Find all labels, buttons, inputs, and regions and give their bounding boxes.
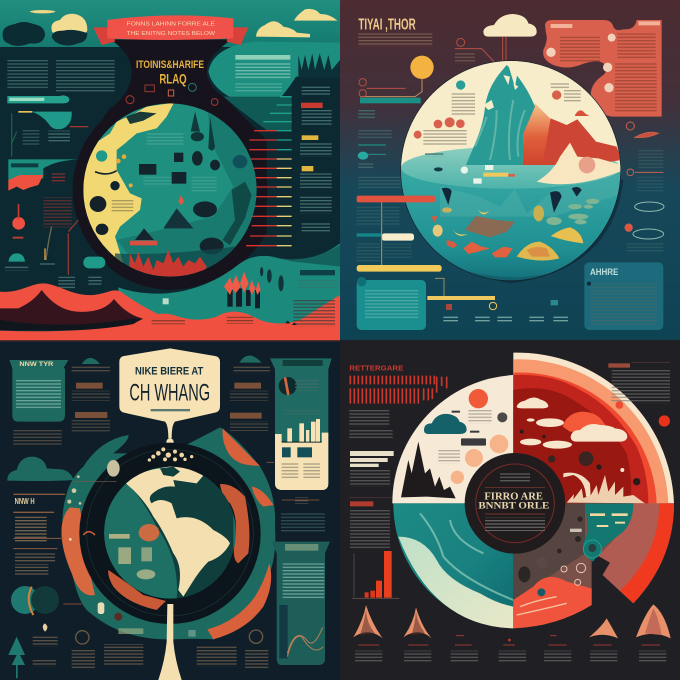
bar chart	[352, 551, 399, 598]
bottom stem	[158, 604, 182, 680]
title callout: CH WHANG	[129, 380, 210, 407]
pie: red quadrant	[513, 353, 674, 503]
seed particles above globe	[148, 447, 193, 462]
title: TIYAI ,THOR	[358, 16, 416, 33]
teal ring with orange currents	[61, 427, 275, 639]
top-right note	[608, 363, 670, 403]
icon: cloud	[483, 14, 537, 63]
right-side text	[267, 462, 325, 532]
caption row	[355, 636, 666, 662]
heading and tally bars	[349, 364, 447, 404]
icon: fingerprint	[67, 460, 120, 505]
pie: teal quadrant	[393, 503, 513, 628]
panel: bottom-left climate change globe infographic	[0, 340, 340, 680]
bottom label	[118, 628, 196, 637]
globe	[400, 40, 623, 287]
globe	[83, 100, 263, 287]
teal-blue panel: AHHRE	[590, 267, 618, 277]
icon row: red peaks	[353, 604, 671, 638]
left bubble diagram	[12, 111, 88, 157]
left pills	[357, 196, 442, 272]
notes right of title	[230, 356, 270, 431]
icon: teal oval	[358, 152, 402, 188]
center disc with title: BNNBT ORLE	[478, 501, 549, 511]
chart panel right	[270, 358, 332, 490]
icon: cream quadrant details	[424, 389, 508, 484]
heading panel left: NNW TYR	[19, 361, 54, 368]
teal pill heading	[7, 95, 69, 103]
pie: cream quadrant	[392, 375, 513, 503]
panel: top-left ocean and forest infographic	[0, 0, 340, 340]
teal-blue panel	[584, 262, 663, 330]
small callouts top-left	[359, 38, 495, 97]
red notes	[43, 173, 72, 227]
title	[136, 59, 204, 86]
heading and tally bars: RETTERGARE	[349, 364, 403, 373]
bottom teal wave	[118, 243, 340, 340]
globe	[104, 466, 236, 599]
panel: top-right mountain and ocean infographic	[340, 0, 680, 340]
title icons	[126, 83, 218, 105]
left notes: NNW H	[15, 497, 35, 506]
icon: red circle gauge	[12, 204, 25, 239]
title	[358, 16, 432, 47]
teal panel	[357, 277, 426, 330]
icon: cloud left	[7, 457, 73, 481]
red speech panel	[543, 20, 662, 117]
title callout	[119, 348, 220, 446]
left text blocks	[349, 410, 394, 548]
bottom red waves	[0, 283, 340, 340]
title callout: NIKE BIERE AT	[135, 365, 203, 377]
top-right teal panel	[208, 42, 340, 108]
banner: FONNS LAHINN FORRE ALE	[127, 21, 216, 27]
banner	[93, 15, 248, 45]
center disc with title: FIRRO ARE	[484, 491, 543, 502]
pie: dark-red quadrant	[513, 503, 674, 628]
title: RLAQ	[159, 70, 187, 86]
icon: black spiky mountain	[401, 442, 456, 498]
left notes	[13, 494, 95, 576]
clouds top right	[256, 9, 337, 37]
heading panel left	[9, 360, 68, 422]
teal capsule	[58, 257, 105, 290]
notes beside heading	[13, 358, 110, 445]
icon: leaf disc	[11, 586, 122, 621]
red and teal mini chart panel	[8, 159, 80, 191]
center disc with title	[465, 453, 565, 554]
icon: teal dome	[5, 253, 28, 270]
icons: tall red-tipped trees	[163, 267, 284, 308]
clouds top left	[3, 10, 87, 46]
yellow connector	[427, 278, 495, 300]
small bottom icons	[8, 623, 263, 678]
right side notes	[300, 85, 332, 232]
small stat row	[443, 300, 568, 322]
right callouts	[625, 122, 664, 253]
teal bar	[358, 98, 421, 145]
bottom notes	[33, 635, 268, 668]
left notes	[7, 59, 115, 93]
panel: bottom-right circular earth layers infographic	[340, 340, 680, 680]
dark funnel and globe ring	[73, 39, 267, 290]
title: ITOINIS&HARIFE	[136, 59, 204, 71]
icon: sun	[360, 56, 434, 97]
small instruments	[40, 220, 78, 275]
text and line chart panel	[272, 542, 330, 665]
banner: THE ENITNG NOTES BELOW	[127, 31, 215, 37]
bar chart right stripes	[223, 97, 292, 246]
